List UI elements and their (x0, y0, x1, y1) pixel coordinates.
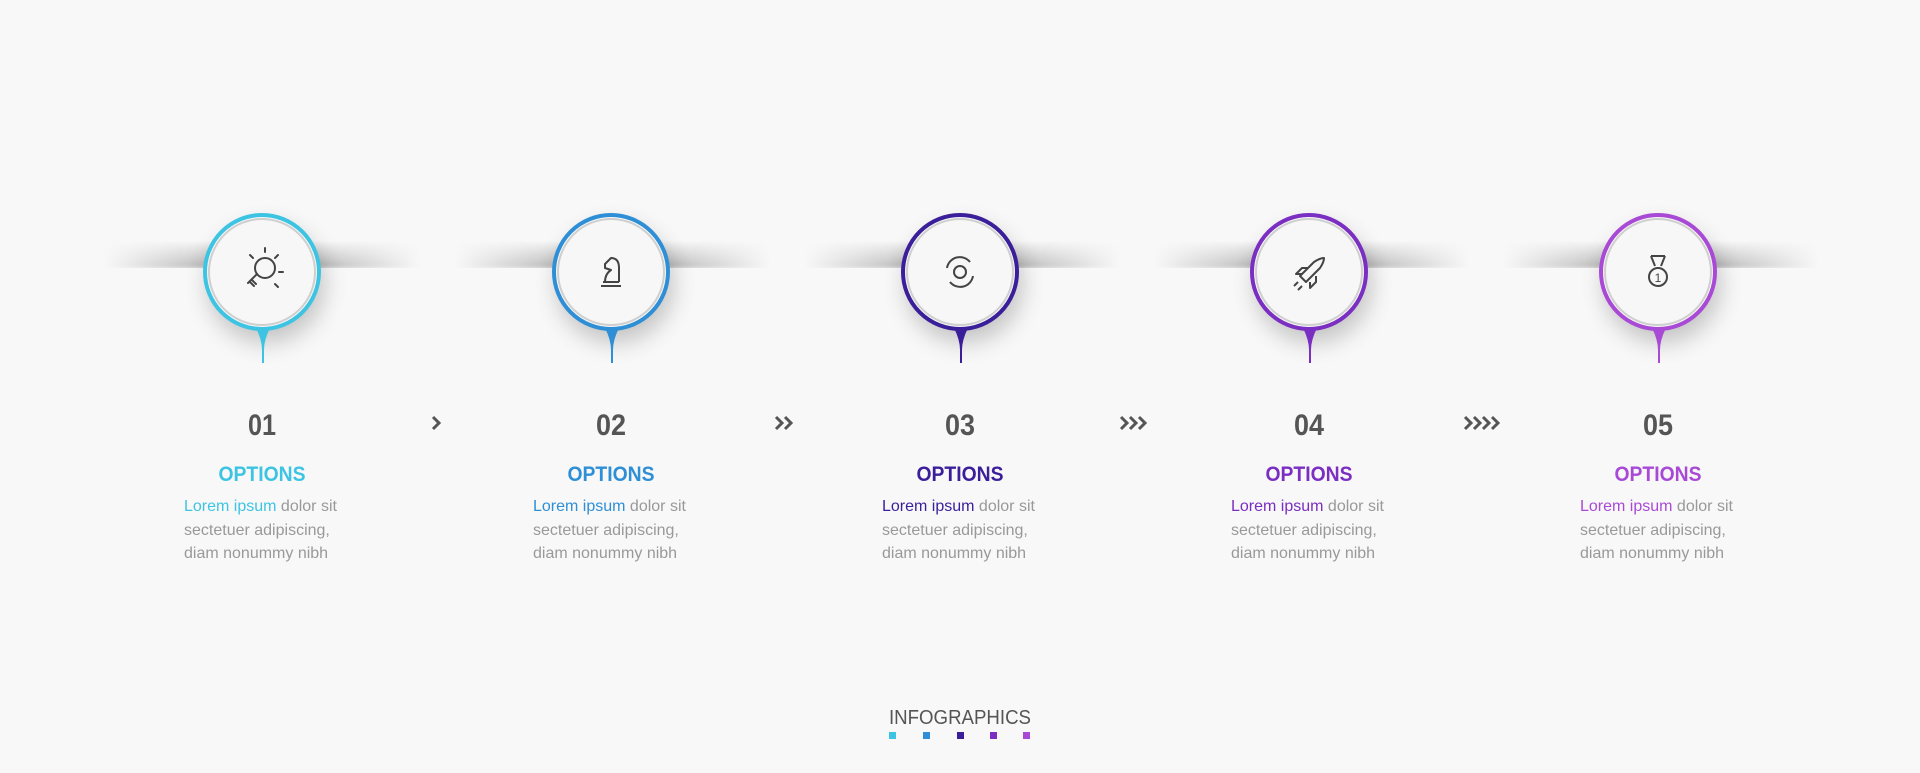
heading: OPTIONS (916, 463, 1004, 486)
icon: medal (1649, 256, 1667, 286)
heading: OPTIONS (1266, 463, 1352, 486)
step 2 (455, 215, 770, 562)
body text: Lorem ipsum dolor sit (1231, 498, 1384, 515)
icon: medal: 1 (1655, 271, 1662, 285)
body text: diam nonummy nibh (1580, 545, 1724, 562)
arrow 1 (433, 417, 439, 429)
number: 02 (596, 409, 626, 442)
body text: Lorem ipsum dolor sit (1580, 498, 1733, 515)
body text: Lorem ipsum dolor sit (184, 498, 337, 515)
step 3 (805, 215, 1120, 562)
body text: sectetuer adipiscing, (184, 522, 330, 539)
heading: OPTIONS (1614, 463, 1702, 486)
icon: rocket (1294, 258, 1324, 290)
step 5 (1503, 215, 1818, 562)
footer color squares (889, 732, 1030, 739)
step 4 (1154, 215, 1469, 562)
body text: diam nonummy nibh (533, 545, 677, 562)
footer title: INFOGRAPHICS (889, 707, 1031, 729)
body text: Lorem ipsum dolor sit (533, 498, 686, 515)
step 1 (105, 215, 420, 562)
arrow 3 (1121, 417, 1145, 429)
body text: Lorem ipsum dolor sit (882, 498, 1035, 515)
icon: refresh (947, 257, 973, 287)
heading: OPTIONS (568, 463, 654, 486)
body text: diam nonummy nibh (184, 545, 328, 562)
icon: chess knight (601, 258, 621, 286)
arrow 4 (1465, 417, 1498, 429)
body text: diam nonummy nibh (882, 545, 1026, 562)
number: 05 (1643, 409, 1673, 442)
arrow 2 (776, 417, 791, 429)
body text: sectetuer adipiscing, (1580, 522, 1726, 539)
icon: lightbulb (248, 248, 283, 287)
number: 01 (248, 409, 276, 442)
body text: sectetuer adipiscing, (1231, 522, 1377, 539)
heading: OPTIONS (218, 463, 306, 486)
body text: sectetuer adipiscing, (533, 522, 679, 539)
body text: diam nonummy nibh (1231, 545, 1375, 562)
number: 04 (1294, 409, 1324, 442)
body text: sectetuer adipiscing, (882, 522, 1028, 539)
number: 03 (945, 409, 975, 442)
